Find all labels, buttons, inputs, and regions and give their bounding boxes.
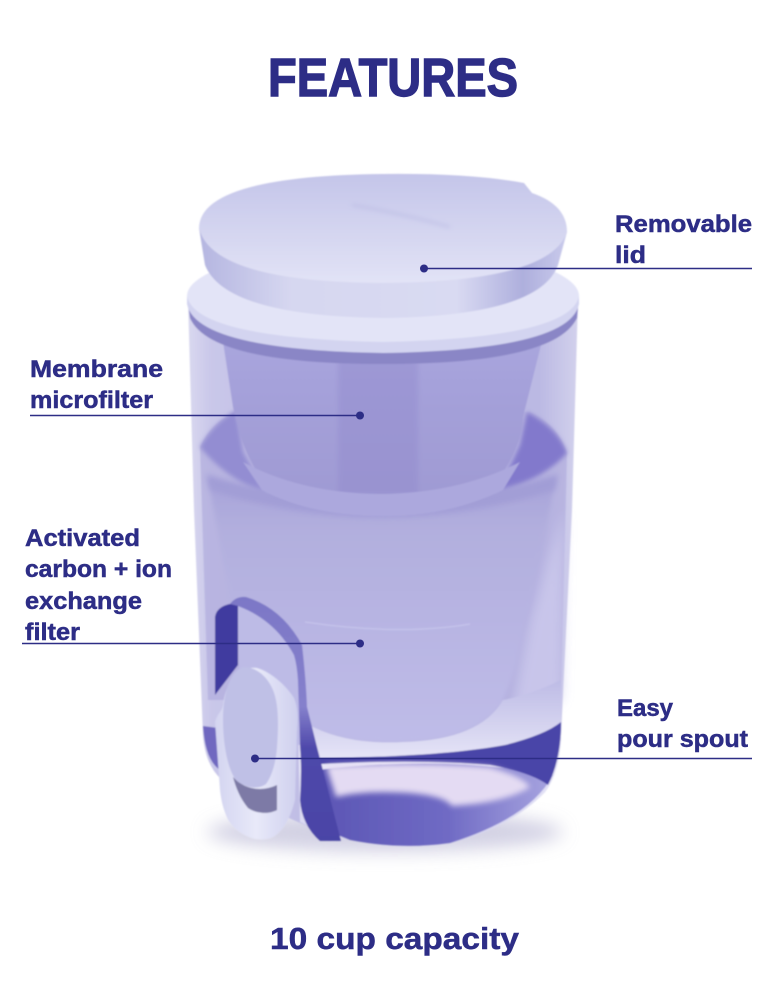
callout: easy pour spout xyxy=(251,695,752,762)
water level band xyxy=(200,410,567,700)
spout tab xyxy=(215,667,298,839)
callout: removable lid xyxy=(420,211,752,272)
spout disc xyxy=(223,667,278,787)
lid rim xyxy=(187,246,579,364)
callout: activated carbon + ion exchange filter xyxy=(22,525,364,648)
callout: easy pour spout: Easy xyxy=(617,695,674,722)
removable lid xyxy=(199,174,567,318)
lower filter xyxy=(208,478,556,742)
spout opening xyxy=(233,777,277,813)
spout arch xyxy=(230,597,341,841)
callout: activated carbon + ion exchange filter: carbon + ion xyxy=(25,556,172,583)
spout interior xyxy=(238,606,300,745)
left base shadow xyxy=(203,726,220,770)
callout: activated carbon + ion exchange filter: Activated xyxy=(25,525,140,552)
lid embossed text mark xyxy=(352,205,450,227)
callout: easy pour spout: pour spout xyxy=(617,726,748,753)
lower filter collar band xyxy=(206,474,558,518)
callout: removable lid: lid xyxy=(615,242,646,269)
jar body xyxy=(188,300,578,846)
upper filter collar xyxy=(243,462,520,516)
right ledge shading xyxy=(498,412,567,492)
ground shadow xyxy=(207,812,563,852)
pink highlight xyxy=(326,763,530,806)
callout: membrane microfilter xyxy=(30,356,364,420)
lower filter seam xyxy=(305,622,470,630)
base glass xyxy=(298,680,561,846)
base dark crescent xyxy=(318,722,561,785)
pitcher illustration xyxy=(187,174,579,852)
title: FEATURES xyxy=(268,48,518,108)
upper filter center band xyxy=(338,355,418,495)
lower glass fill xyxy=(318,763,553,846)
callout: activated carbon + ion exchange filter: exchange xyxy=(25,588,142,615)
left ledge shading xyxy=(200,410,266,494)
capacity caption: 10 cup capacity xyxy=(270,921,520,956)
callout: membrane microfilter: Membrane xyxy=(30,356,163,383)
callout: activated carbon + ion exchange filter: filter xyxy=(25,619,80,646)
callout: removable lid: Removable xyxy=(615,211,752,238)
upper filter xyxy=(222,333,544,495)
callout: membrane microfilter: microfilter xyxy=(30,387,153,414)
right glass highlight xyxy=(510,510,564,720)
spout channel left strip xyxy=(215,603,238,695)
